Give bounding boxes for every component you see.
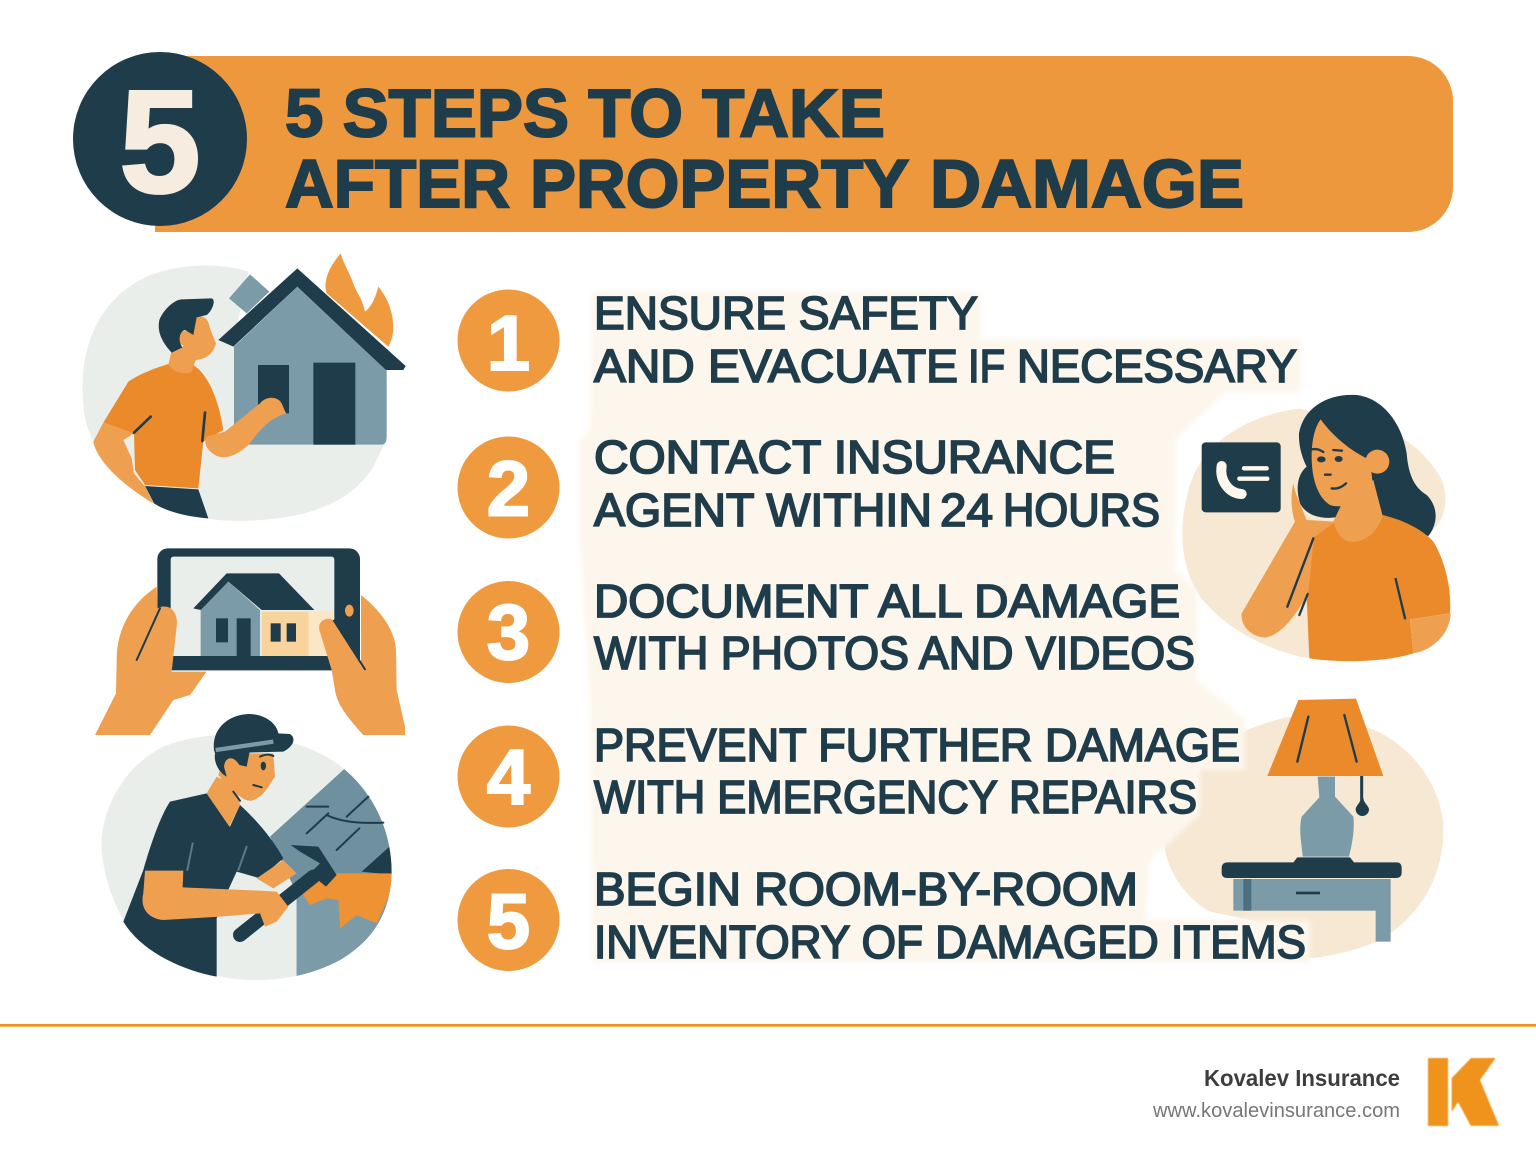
step 2 text: AGENT WITHIN bbox=[594, 484, 932, 536]
footer company name: Kovalev Insurance bbox=[1204, 1065, 1400, 1091]
step 1 badge bbox=[458, 290, 560, 392]
title: DAMAGE bbox=[930, 146, 1244, 222]
step 3 badge bbox=[458, 581, 560, 683]
step 1 bbox=[458, 287, 1297, 392]
illustration: lamp on side table bbox=[1163, 699, 1443, 958]
illustration: woman on phone bbox=[1182, 395, 1451, 661]
step 1 text: NECESSARY bbox=[1017, 340, 1297, 392]
illustration: man beside burning house bbox=[82, 253, 406, 521]
step 5 badge: 5 bbox=[487, 877, 530, 965]
step 5 bbox=[458, 863, 1306, 971]
step 4 text: PREVENT FURTHER DAMAGE bbox=[594, 719, 1240, 771]
step 4 badge: 4 bbox=[487, 733, 530, 821]
icon: phone card bbox=[1202, 442, 1281, 512]
illustration: worker repairing roof with hammer bbox=[101, 714, 413, 983]
step 1 text: IF bbox=[968, 340, 1005, 392]
step 3 bbox=[458, 575, 1195, 683]
title: AFTER bbox=[285, 146, 510, 222]
footer website: www.kovalevinsurance.com bbox=[1152, 1100, 1400, 1122]
step 5 text: BEGIN ROOM-BY-ROOM bbox=[594, 863, 1138, 915]
step 4 badge bbox=[458, 726, 560, 828]
banner bar bbox=[155, 56, 1453, 232]
step 2 text: HOURS bbox=[1003, 484, 1160, 536]
step 3 text: DOCUMENT ALL DAMAGE bbox=[594, 575, 1180, 627]
step 3 text: WITH PHOTOS AND VIDEOS bbox=[594, 627, 1195, 679]
logo: K mark bbox=[1428, 1058, 1499, 1126]
step 4 text: WITH EMERGENCY REPAIRS bbox=[594, 771, 1197, 823]
step 2 badge bbox=[458, 436, 560, 538]
footer divider bbox=[0, 1024, 1536, 1027]
step 5 text: INVENTORY OF DAMAGED ITEMS bbox=[594, 916, 1306, 968]
illustration: hands photographing house on tablet bbox=[95, 548, 405, 735]
step 2 text: 24 bbox=[940, 484, 993, 536]
title: 5 STEPS TO TAKE bbox=[285, 76, 885, 152]
step 2 text: CONTACT INSURANCE bbox=[594, 431, 1115, 483]
step 1 badge: 1 bbox=[487, 299, 530, 387]
title: PROPERTY bbox=[530, 146, 909, 222]
header banner bbox=[73, 52, 1453, 232]
step 3 badge: 3 bbox=[487, 588, 530, 676]
step 5 badge bbox=[458, 869, 560, 971]
step 4 bbox=[458, 719, 1253, 828]
badge: number 5: 5 bbox=[119, 60, 201, 223]
step 1 text: ENSURE SAFETY bbox=[594, 287, 977, 339]
badge: number 5 bbox=[73, 52, 247, 226]
step 2 badge: 2 bbox=[487, 444, 530, 532]
cream text backdrop bbox=[580, 292, 1310, 962]
step 2 bbox=[458, 431, 1160, 538]
step 1 text: AND EVACUATE bbox=[594, 340, 958, 392]
